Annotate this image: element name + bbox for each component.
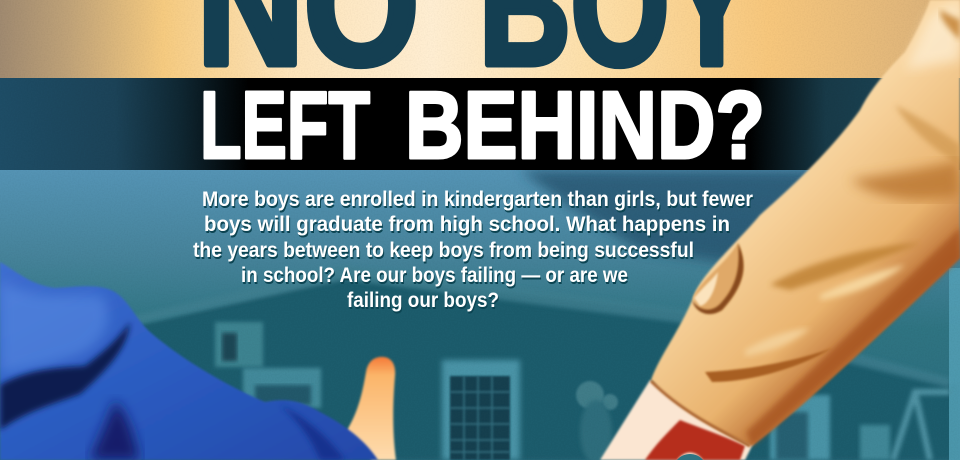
elbow button fold [693, 243, 743, 313]
right window [770, 395, 830, 460]
lower fold [90, 400, 140, 460]
title: no boy [197, 0, 754, 101]
cuff fold [280, 405, 345, 460]
gears [576, 381, 604, 409]
illustration: adult's tan sleeve [651, 0, 960, 446]
roof [132, 266, 950, 388]
illustration: school building [132, 170, 960, 460]
sleeve shadow [0, 322, 130, 430]
illustration: adult's hand [600, 380, 755, 460]
intro text: failing our boys? [347, 289, 499, 312]
intro text: boys will graduate from high school. What happens in [204, 213, 730, 236]
right edge shading [746, 228, 960, 446]
tree shadow [520, 170, 880, 265]
air conditioner [215, 322, 263, 367]
intro text: More boys are enrolled in kindergarten than girls, but fewer [202, 188, 753, 211]
intro text [193, 188, 753, 312]
panel: tan title band [0, 0, 960, 79]
upper highlight [905, 0, 960, 70]
intro text: the years between to keep boys from being successful [193, 239, 694, 262]
cuff seam [651, 381, 750, 446]
far window [860, 425, 890, 460]
sleeve highlight [0, 280, 108, 375]
title: left behind: LEFT [200, 72, 370, 179]
title: left behind: BEHIND? [405, 72, 765, 179]
sleeve creases [770, 243, 920, 290]
swing frame [893, 392, 950, 460]
wall [140, 275, 960, 460]
panel: blue background [0, 168, 960, 460]
folds [940, 10, 960, 40]
title: left behind [200, 72, 765, 179]
left window [243, 368, 321, 408]
illustration: child's blue sleeve [0, 262, 378, 460]
panel: dark title band [0, 78, 960, 170]
illustration: child's finger [346, 357, 396, 460]
intro text: in school? Are our boys failing — or are we [241, 264, 628, 287]
edge strip [949, 268, 960, 460]
centre window [442, 360, 520, 460]
